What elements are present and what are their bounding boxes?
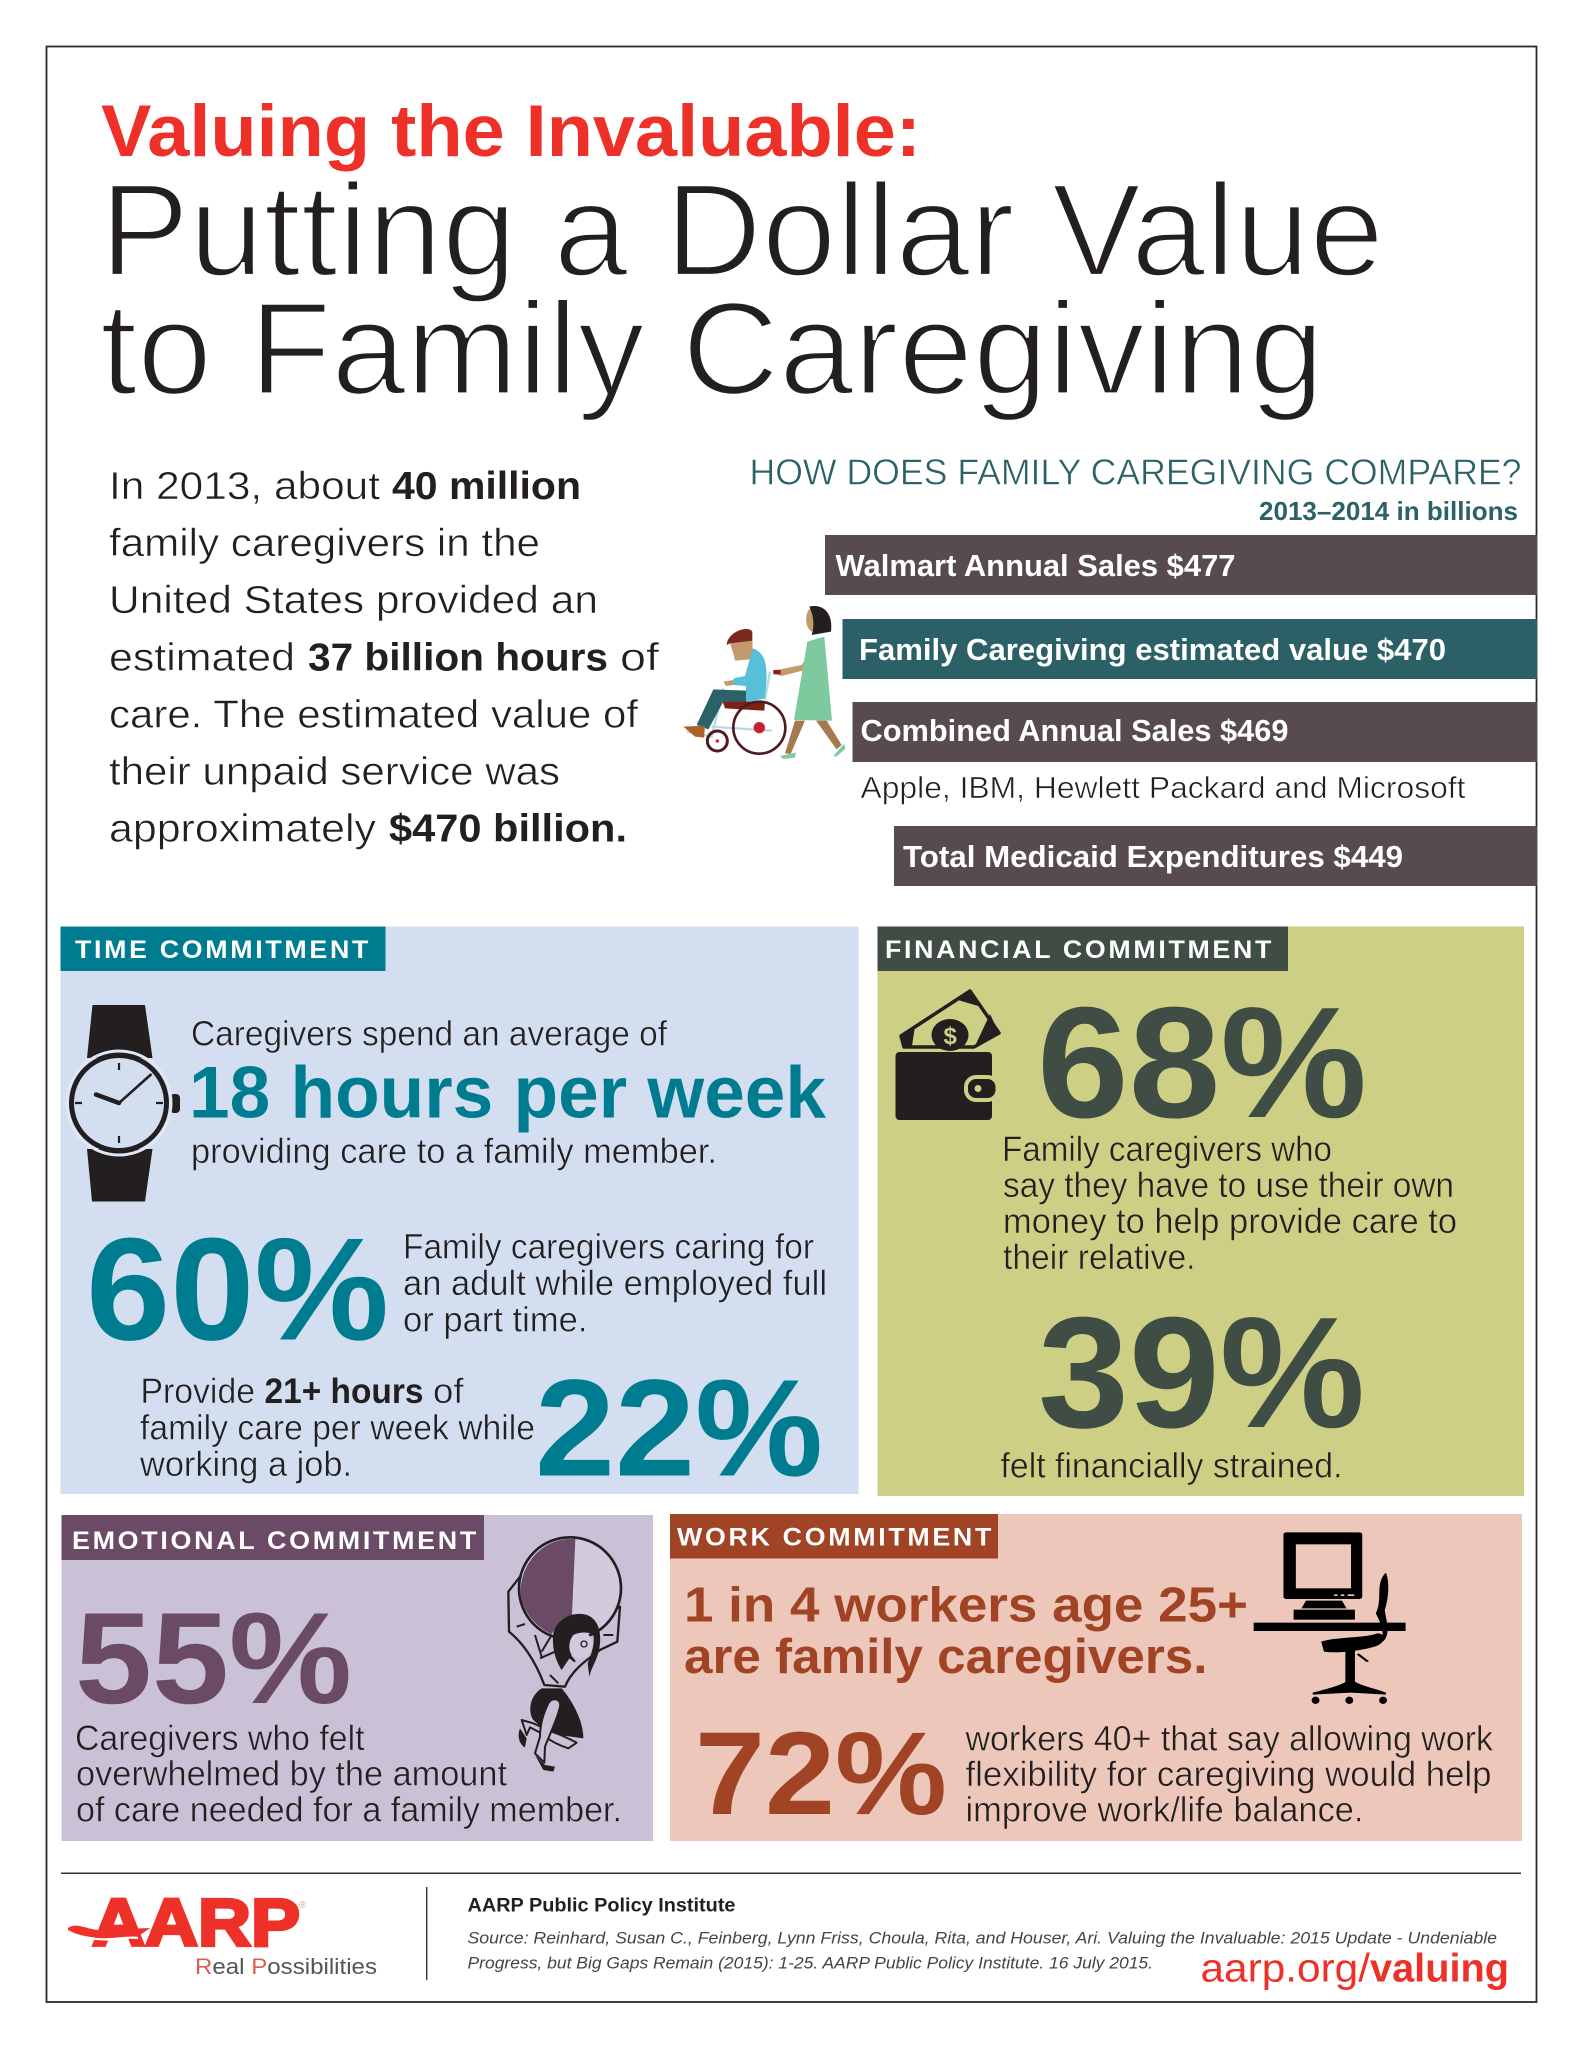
stat: 68%: [1002, 975, 1457, 1277]
intro paragraph: estimated: [109, 636, 295, 680]
panel label: time commitment: [60, 926, 386, 971]
icon: wallet with money: [896, 991, 999, 1120]
intro paragraph: 40 million: [392, 465, 581, 508]
bar: combined annual sales: [852, 702, 1537, 762]
logo: AARP Real Possibilities: ®: [299, 1900, 307, 1911]
source text: Progress, but Big Gaps Remain (2015): 1-25. AARP Public Policy Institute. 16 July 2015.: [468, 1954, 1153, 1972]
stat: 68%: their relative.: [1003, 1238, 1196, 1277]
title line: Valuing the Invaluable: Valuing the Invaluable:: [101, 91, 921, 172]
comparison heading: [750, 452, 1522, 526]
panel label: financial commitment: FINANCIAL COMMITMENT: [885, 936, 1274, 964]
icon: wallet with money: $: [944, 1023, 958, 1050]
logo: AARP Real Possibilities: [68, 1886, 377, 1979]
web address: aarp.org/: [1200, 1946, 1371, 1990]
panel label: emotional commitment: [62, 1515, 484, 1560]
web address: valuing: [1370, 1946, 1509, 1990]
stat: 22%: 22%: [535, 1352, 823, 1506]
bar: Walmart: Walmart Annual Sales $477: [836, 548, 1236, 583]
stat: 18 hours per week: [189, 1014, 826, 1171]
stat: 55%: 55%: [75, 1585, 352, 1731]
stat: 1 in 4 workers: [684, 1578, 1248, 1684]
stat: 1 in 4 workers: are family caregivers.: [684, 1630, 1208, 1684]
bar: Medicaid: Total Medicaid Expenditures $449: [903, 839, 1403, 874]
stat: 1 in 4 workers: 1 in 4 workers age 25+: [684, 1578, 1248, 1632]
figure: upper body and pie: [508, 1537, 621, 1687]
stat: 22%: family care per week while: [140, 1408, 535, 1448]
title line: to Family Caregiving: to Family Caregiving: [100, 275, 1324, 422]
stat: 39%: felt financially strained.: [1000, 1446, 1342, 1486]
stat: 22%: Provide: [140, 1372, 255, 1411]
footer divider: [426, 1887, 427, 1980]
stat: 68%: money to help provide care to: [1003, 1202, 1457, 1241]
stat: 55%: overwhelmed by the amount: [76, 1754, 507, 1794]
stat: 60%: or part time.: [403, 1300, 588, 1340]
stat: 72%: workers 40+ that say allowing work: [965, 1720, 1493, 1758]
intro paragraph: In 2013, about: [109, 465, 380, 508]
stat: 68%: say they have to use their own: [1003, 1166, 1454, 1205]
title: [100, 91, 1384, 422]
title line: Putting a Dollar Value: Putting a Dollar Value: [100, 156, 1384, 304]
panel label: time commitment: TIME COMMITMENT: [75, 936, 371, 964]
intro paragraph: their unpaid service was: [109, 750, 560, 794]
panel: emotional commitment: [62, 1515, 653, 1841]
comparison heading: 2013–2014 in billions: [1259, 496, 1518, 526]
stat: 22%: [139, 1352, 823, 1506]
stat: 68%: 68%: [1037, 975, 1367, 1151]
intro paragraph: United States provided an: [109, 579, 598, 622]
figure: skirt and legs: [519, 1688, 583, 1772]
stat: 55%: [75, 1585, 622, 1830]
bar: combined annual sales: Combined Annual Sales $469: [860, 713, 1288, 748]
source text: Source: Reinhard, Susan C., Feinberg, Lynn Friss, Choula, Rita, and Houser, Ari. Valuing the Invaluable: 2015 Update - Undeniable: [468, 1928, 1497, 1948]
intro paragraph: care. The estimated value of: [109, 694, 638, 736]
footer rule: [61, 1872, 1521, 1874]
bar: family caregiving: Family Caregiving estimated value $470: [859, 632, 1446, 667]
intro paragraph: [109, 465, 659, 850]
intro paragraph: of: [620, 636, 659, 680]
panel: work commitment: [670, 1514, 1522, 1841]
intro paragraph: 37 billion hours: [308, 636, 608, 680]
icon: wristwatch: [67, 1005, 180, 1202]
stat: 72%: [695, 1708, 1493, 1840]
source text: AARP Public Policy Institute: [468, 1896, 736, 1916]
stat: 72%: flexibility for caregiving would help: [966, 1755, 1492, 1794]
bar: Walmart: [825, 535, 1537, 595]
stat: 22%: working a job.: [139, 1445, 352, 1484]
stat: 22%: of: [433, 1372, 464, 1411]
logo: AARP Real Possibilities: AARP: [92, 1886, 300, 1960]
panel label: work commitment: WORK COMMITMENT: [677, 1524, 994, 1552]
web address: [1200, 1946, 1509, 1990]
stat: 72%: improve work/life balance.: [966, 1790, 1364, 1830]
stat: 68%: Family caregivers who: [1002, 1130, 1332, 1169]
panel label: emotional commitment: EMOTIONAL COMMITMENT: [72, 1527, 479, 1555]
panel: financial commitment: [878, 926, 1524, 1496]
icon: computer desk and chair: [1254, 1532, 1406, 1704]
stat: 18 hours per week: Caregivers spend an average of: [191, 1014, 667, 1054]
panel label: work commitment: [670, 1514, 998, 1558]
stat: 18 hours per week: 18 hours per week: [189, 1052, 826, 1134]
stat: 55%: of care needed for a family member.: [76, 1790, 622, 1830]
source text: [468, 1896, 1497, 1972]
panel: time commitment: [60, 926, 858, 1506]
stat: 60%: an adult while employed full: [403, 1264, 827, 1303]
stat: 60%: Family caregivers caring for: [403, 1228, 814, 1266]
bar: Medicaid: [894, 826, 1537, 886]
logo: AARP Real Possibilities: Real Possibilities: [195, 1954, 377, 1979]
stat: 39%: 39%: [1038, 1285, 1365, 1461]
panel label: financial commitment: [878, 926, 1288, 971]
icon: person holding up a pie chart: [508, 1537, 621, 1772]
stat: 60%: 60%: [86, 1208, 389, 1370]
intro paragraph: $470 billion.: [389, 808, 627, 850]
stat: 60%: [86, 1208, 827, 1370]
stat: 72%: 72%: [695, 1708, 947, 1840]
bar: family caregiving: [842, 619, 1537, 679]
note: combined companies: Apple, IBM, Hewlett Packard and Microsoft: [860, 770, 1466, 805]
stat: 22%: 21+ hours: [264, 1372, 424, 1411]
intro paragraph: family caregivers in the: [109, 522, 540, 565]
stat: 55%: Caregivers who felt: [75, 1719, 365, 1758]
stat: 18 hours per week: providing care to a family member.: [191, 1132, 717, 1171]
comparison heading: HOW DOES FAMILY CAREGIVING COMPARE?: [750, 452, 1522, 492]
intro paragraph: approximately: [109, 808, 377, 850]
icon: wheelchair and caregiver: [683, 606, 846, 759]
